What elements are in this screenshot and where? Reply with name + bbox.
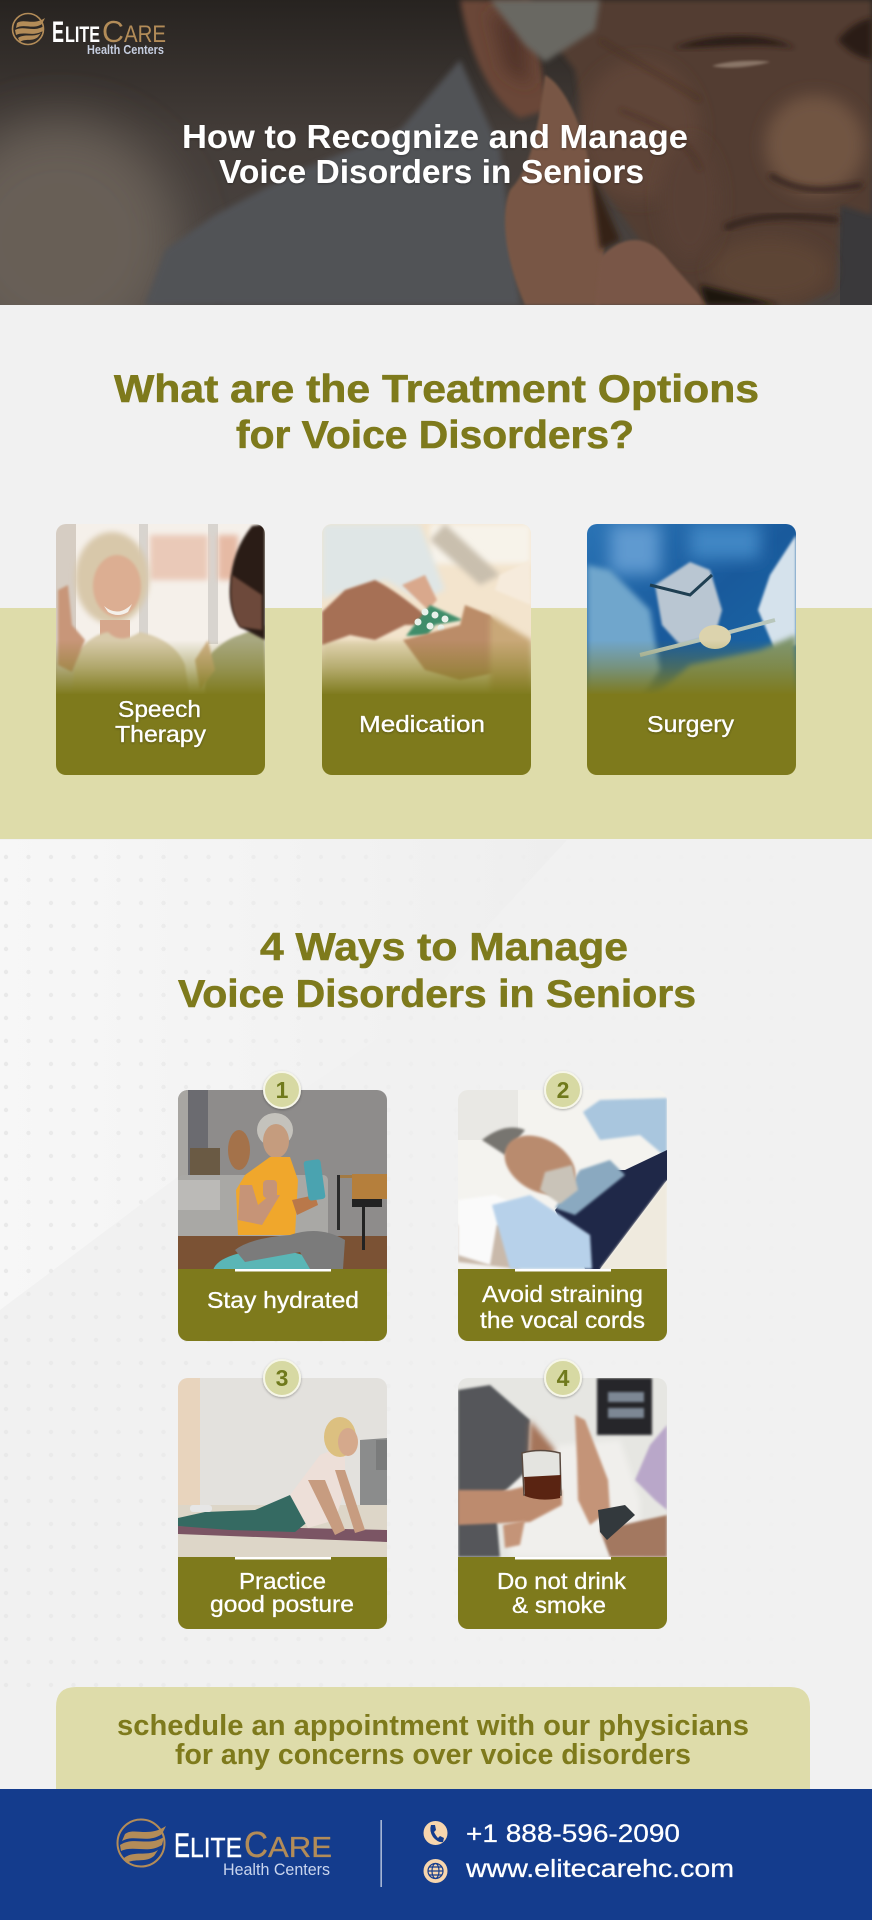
footer xyxy=(0,1789,872,1920)
card 4: no drink and smoke xyxy=(458,1378,667,1629)
card 4: no drink and smoke: Do not drink xyxy=(497,1568,627,1594)
card: medication xyxy=(322,524,531,775)
title: Voice Disorders in Seniors xyxy=(219,153,644,190)
card 2: avoid straining: Avoid straining xyxy=(482,1281,643,1307)
badge 4 xyxy=(545,1360,581,1396)
heading: treatment options: for Voice Disorders? xyxy=(236,414,634,457)
caption xyxy=(458,1269,667,1341)
caption xyxy=(178,1557,387,1629)
photo: hands with pills xyxy=(322,524,531,700)
heading: 4 ways: 4 Ways to Manage xyxy=(260,926,628,969)
card 2: avoid straining: the vocal cords xyxy=(480,1307,645,1333)
badge 2: 2 xyxy=(557,1077,569,1103)
card 3: good posture: Practice xyxy=(239,1568,326,1594)
label xyxy=(115,696,207,747)
label: Speech xyxy=(118,696,201,722)
panel: treatment band xyxy=(0,608,872,839)
card 1: stay hydrated: Stay hydrated xyxy=(207,1287,359,1313)
logo: top left: Health Centers xyxy=(87,43,164,57)
photo: woman doing yoga xyxy=(178,1378,387,1557)
caption xyxy=(458,1557,667,1629)
badge 3 xyxy=(264,1360,300,1396)
footer logo: Health Centers xyxy=(223,1860,330,1879)
badge 4: 4 xyxy=(557,1365,570,1391)
photo: man in bed xyxy=(458,1090,667,1269)
ear and hair xyxy=(460,0,548,118)
hand xyxy=(505,75,605,305)
card 1: stay hydrated xyxy=(178,1090,387,1341)
label: Surgery xyxy=(647,711,735,737)
title xyxy=(182,118,688,190)
icon: phone xyxy=(424,1821,448,1845)
label: Medication xyxy=(359,711,485,737)
logo: top left xyxy=(12,14,166,57)
callout: schedule appointment: for any concerns over voice disorders xyxy=(175,1739,691,1771)
footer logo: C xyxy=(244,1824,268,1865)
card: surgery xyxy=(587,524,796,775)
heading: treatment options: What are the Treatment Options xyxy=(114,368,759,411)
heading: 4 ways: Voice Disorders in Seniors xyxy=(178,973,696,1016)
callout: schedule appointment: schedule an appointment with our physicians xyxy=(117,1710,749,1742)
card 3: good posture xyxy=(178,1378,387,1629)
logo: top left: C xyxy=(102,14,124,49)
badge 3: 3 xyxy=(276,1365,288,1391)
face xyxy=(520,0,872,305)
badge 2 xyxy=(545,1072,581,1108)
label: Therapy xyxy=(115,721,207,747)
caption xyxy=(178,1269,387,1341)
photo: refusing a drink xyxy=(458,1378,667,1557)
logo: top left: ARE xyxy=(124,21,166,48)
logo: top left: LITE xyxy=(65,22,100,47)
badge 1 xyxy=(264,1072,300,1108)
photo: surgeons xyxy=(587,524,796,700)
logo: top left: E xyxy=(52,16,64,49)
card 3: good posture: good posture xyxy=(210,1591,354,1617)
website: www.elitecarehc.com xyxy=(465,1855,734,1883)
footer logo xyxy=(118,1820,332,1879)
badge 1: 1 xyxy=(276,1077,289,1103)
footer logo: E xyxy=(174,1827,190,1865)
footer logo: ARE xyxy=(268,1832,332,1864)
footer logo: LITE xyxy=(190,1832,242,1863)
title: How to Recognize and Manage xyxy=(182,118,688,155)
callout: schedule appointment xyxy=(56,1687,810,1789)
icon: globe xyxy=(424,1859,448,1883)
card 4: no drink and smoke: & smoke xyxy=(512,1592,606,1618)
photo: woman with bottle xyxy=(178,1090,387,1269)
card: speech therapy xyxy=(56,524,265,775)
photo: smiling woman xyxy=(56,524,265,700)
heading: treatment options xyxy=(114,368,759,457)
card 2: avoid straining xyxy=(458,1090,667,1341)
hero banner xyxy=(0,0,872,305)
heading: 4 ways xyxy=(178,926,696,1016)
phone number: +1 888-596-2090 xyxy=(466,1820,680,1848)
